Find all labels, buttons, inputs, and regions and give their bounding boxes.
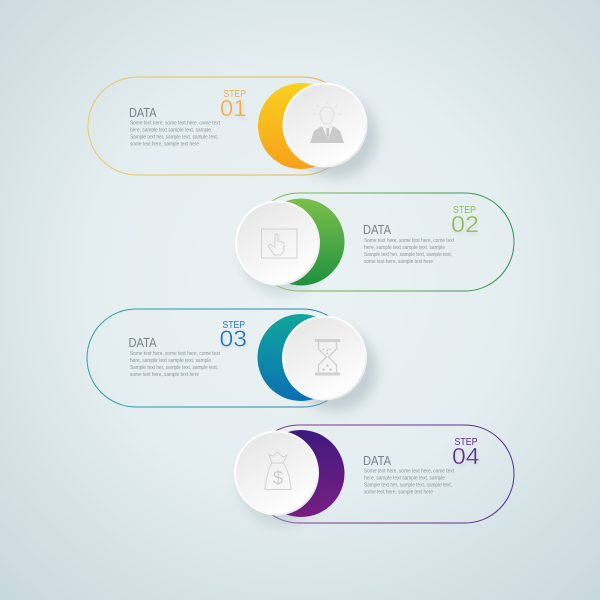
step 3 label: 03	[220, 326, 247, 352]
text block: step 3: Some text here, some text here, come text	[130, 351, 220, 357]
step 1 label	[220, 88, 248, 124]
coloured circle: step 4	[258, 430, 344, 517]
text block: step 1	[129, 105, 220, 147]
step 1 label: 01	[222, 98, 248, 124]
step 3 label	[220, 319, 248, 354]
step 2 label: STEP	[453, 204, 476, 216]
icon: money bag: $	[273, 468, 284, 490]
text block: step 3: here, sample text sample text, sample	[130, 358, 211, 364]
white circle: step 2	[235, 200, 320, 286]
circle shadow: step 2	[241, 213, 323, 295]
text block: step 4: here, sample text sample text, sample	[364, 475, 445, 481]
text block: step 4: DATA	[363, 453, 391, 468]
text block: step 1: here, sample text sample text, sample	[130, 127, 211, 133]
step 3 label: STEP	[222, 319, 245, 331]
icon: money bag	[265, 452, 291, 490]
step 4 label: 04	[452, 443, 480, 469]
circle shadow: step 1	[295, 96, 377, 178]
text block: step 2: DATA	[363, 222, 391, 237]
text block: step 1: Sample text her, sample text, sample text,	[130, 134, 218, 140]
white circle: step 4	[234, 430, 319, 516]
text block: step 2	[363, 222, 454, 265]
text block: step 1: Some text here, some text here, come text	[130, 121, 220, 127]
text block: step 4: Sample text her, sample text, sample text,	[364, 482, 452, 488]
outline: step 2	[250, 193, 514, 291]
step 4 label	[452, 436, 480, 472]
step 1 label: STEP	[224, 88, 246, 100]
text block: step 3	[128, 335, 220, 378]
coloured circle: step 2	[258, 198, 344, 286]
coloured circle: step 1	[258, 83, 344, 169]
circle shadow: step 3	[295, 329, 377, 411]
text block: step 3: some text here, sample text here	[130, 372, 199, 378]
text block: step 4: some text here, sample text here	[364, 489, 433, 495]
icon: hourglass	[315, 339, 340, 376]
outline: step 3	[87, 309, 352, 407]
text block: step 1: DATA	[129, 105, 157, 120]
panel: step 3	[87, 309, 377, 411]
text block: step 2: Some text here, some text here, come text	[364, 238, 454, 244]
icon: lightbulb and businessman	[310, 101, 344, 143]
step 1 label: 01	[220, 95, 246, 121]
white circle: step 3	[282, 316, 367, 400]
panel: step 2	[235, 193, 514, 295]
step 3 label: 03	[222, 328, 248, 354]
panel: step 4	[234, 425, 514, 526]
icon: hand pointer in frame	[262, 229, 297, 258]
text block: step 2: here, sample text sample text, sample	[364, 245, 445, 251]
step 2 label: 02	[454, 214, 479, 240]
step 2 label	[451, 204, 479, 240]
text block: step 2: some text here, sample text here	[364, 259, 433, 265]
text block: step 1: some text here, sample text here	[130, 141, 199, 147]
panel: step 1	[88, 77, 377, 178]
text block: step 3: DATA	[128, 335, 157, 350]
text block: step 4: Some text here, some text here, come text	[364, 469, 454, 475]
text block: step 4	[363, 453, 454, 495]
outline: step 4	[250, 425, 514, 523]
circle shadow: step 4	[240, 444, 322, 526]
coloured circle: step 3	[258, 314, 344, 401]
outline: step 1	[88, 77, 352, 175]
step 4 label: STEP	[454, 436, 478, 448]
text block: step 2: Sample text her, sample text, sample text,	[364, 252, 452, 258]
white circle: step 1	[282, 82, 368, 168]
step 2 label: 02	[451, 211, 479, 237]
text block: step 3: Sample text her, sample text, sample text,	[130, 365, 218, 371]
step 4 label: 04	[454, 446, 480, 472]
